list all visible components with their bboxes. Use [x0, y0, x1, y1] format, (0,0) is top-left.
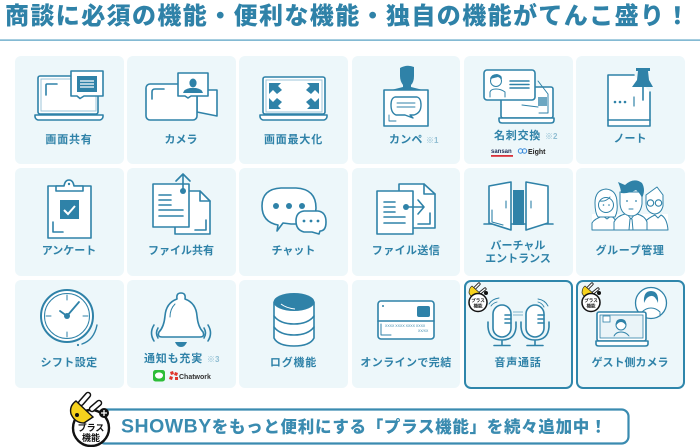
badge: plus feature [582, 284, 601, 312]
label line 2: エントランス [485, 252, 551, 265]
title: 商談に必須の機能・便利な機能・独自の機能がてんこ盛り！ [5, 2, 691, 30]
label: ファイル送信 [372, 243, 440, 257]
label: カメラ [164, 133, 198, 146]
panel: ログ機能 [239, 280, 348, 388]
note mark: ※2 [545, 132, 558, 141]
note mark: ※1 [426, 136, 439, 145]
icon: plug badge [71, 395, 109, 446]
icon: virtual door [484, 182, 553, 230]
panel: ファイル共有 [127, 168, 236, 276]
panel: チャット [239, 168, 348, 276]
icon: maximize screen [260, 77, 327, 120]
icon: business card and laptop [484, 70, 554, 123]
icon: chat bubbles [262, 188, 326, 234]
label: グループ管理 [596, 243, 664, 257]
panel: ゲスト側カメラ [577, 281, 684, 388]
panel: グループ管理 [576, 168, 685, 276]
panel: カンペ [352, 56, 460, 164]
icon: group of people [592, 180, 668, 230]
note mark: ※3 [207, 355, 220, 364]
label: ファイル共有 [148, 243, 214, 257]
panel: ノート [576, 56, 685, 164]
logo: LINE [153, 370, 165, 382]
icon: clock [41, 290, 97, 346]
icon: file upload [153, 174, 210, 234]
icon: file send [377, 184, 435, 234]
panel: ファイル送信 [352, 168, 460, 276]
panel: 画面共有 [15, 56, 124, 164]
panel: 通知も充実 [127, 280, 236, 388]
logo: sansan: sansan [491, 149, 512, 155]
icon: credit card: XXXX XXXX XXXX XXXX [385, 324, 426, 328]
panel: バーチャルエントランス [464, 168, 573, 276]
label: カンペ [389, 133, 423, 146]
icon: plug badge: 機能 [82, 432, 100, 443]
label: 音声通話 [494, 355, 542, 369]
label: バーチャル [491, 239, 545, 252]
icon: guest camera laptop [596, 288, 666, 346]
badge: plus feature: 機能 [474, 302, 483, 310]
label: 画面共有 [45, 132, 93, 146]
icon: bell [152, 293, 210, 347]
label: ノート [614, 133, 646, 145]
icon: clipboard [48, 180, 91, 238]
panel: アンケート [15, 168, 124, 276]
banner: plus features [71, 395, 629, 446]
label: ログ機能 [270, 355, 317, 369]
panel: 名刺交換 [464, 56, 573, 164]
panel: シフト設定 [15, 280, 124, 388]
icon: credit card: XX/XX [418, 329, 429, 333]
icon: database [274, 293, 314, 346]
icon: plug badge: プラス [78, 423, 104, 433]
label: シフト設定 [40, 356, 98, 369]
panel: 音声通話 [465, 281, 572, 388]
panel: カメラ [127, 56, 236, 164]
panel: 画面最大化 [239, 56, 348, 164]
label: ゲスト側カメラ [592, 355, 668, 369]
icon: two microphones [488, 298, 549, 346]
badge: plus feature: 機能 [586, 302, 596, 310]
label: 画面最大化 [264, 132, 323, 146]
label: 名刺交換 [494, 128, 541, 142]
label: チャット [272, 244, 315, 257]
badge: plus feature [469, 284, 488, 312]
label: 通知も充実 [144, 351, 203, 365]
icon: credit card [378, 301, 434, 339]
banner text: SHOWBYをもっと便利にする「プラス機能」を続々追加中！ [121, 416, 607, 438]
icon: pinned note [608, 68, 653, 126]
logo: Eight: Eight [528, 149, 546, 156]
badge: plus feature: プラス [584, 297, 598, 304]
icon: laptop screen share [35, 71, 103, 120]
icon: camera windows [146, 73, 217, 120]
badge: plus feature: プラス [471, 297, 485, 304]
label: アンケート [42, 244, 96, 257]
icon: person holding board [384, 66, 428, 126]
label: オンラインで完結 [360, 355, 452, 369]
panel: オンラインで完結 [352, 280, 460, 388]
logo: Chatwork: Chatwork [179, 374, 211, 381]
